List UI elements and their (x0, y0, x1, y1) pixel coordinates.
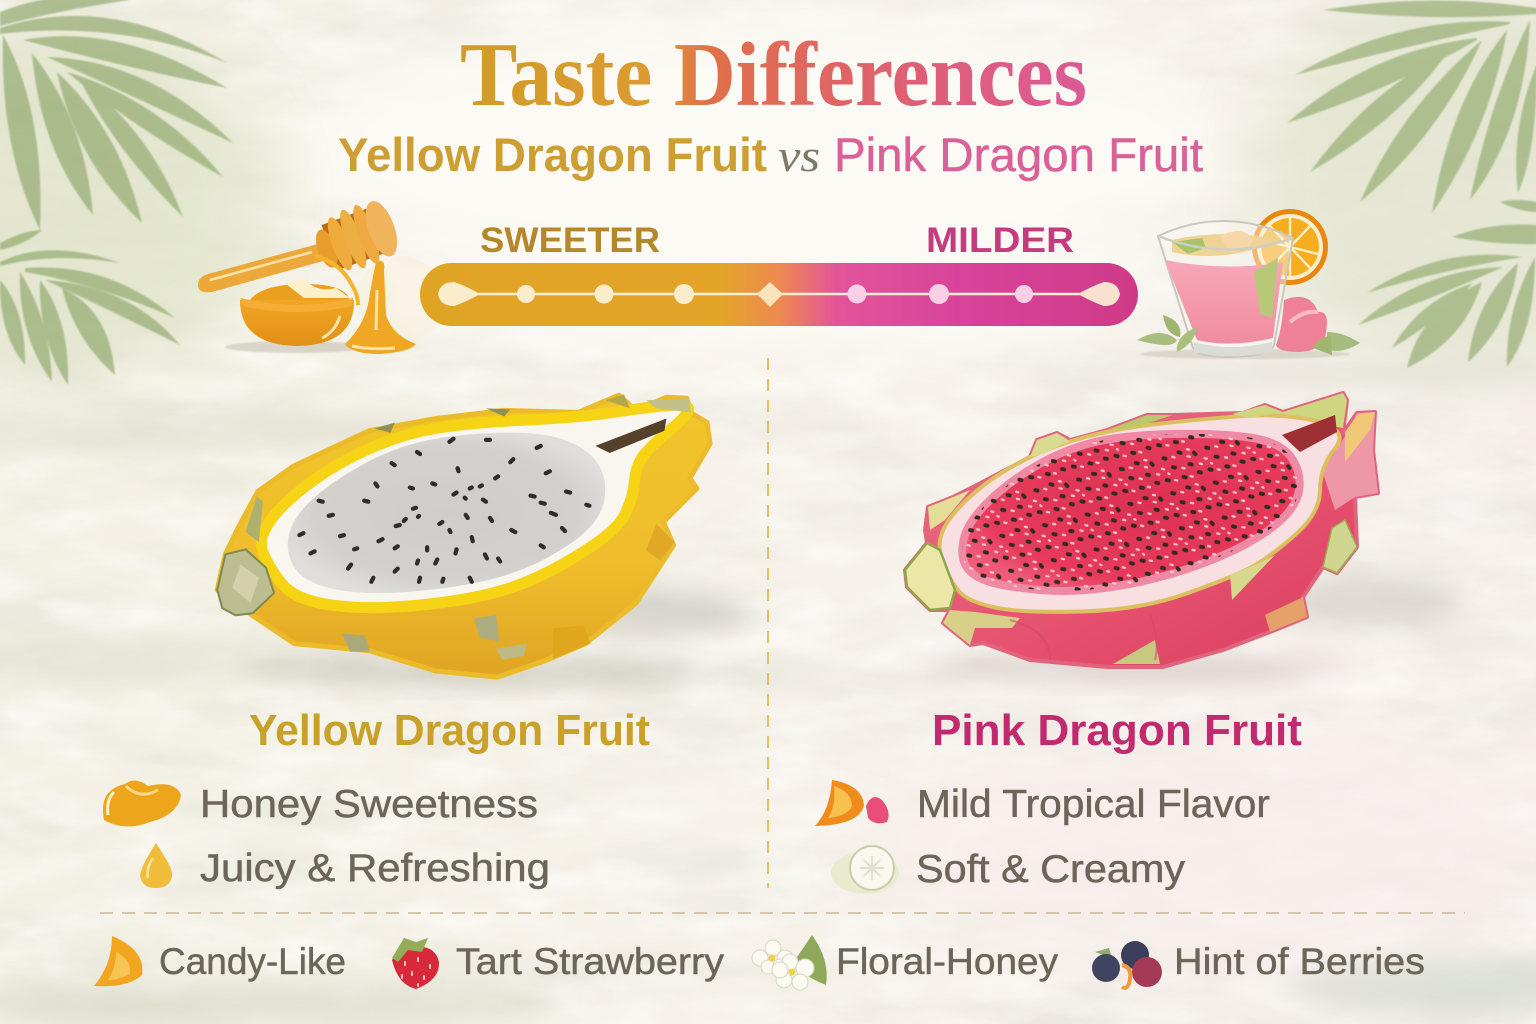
icon: pink smoothie with orange (1137, 209, 1360, 359)
pith (939, 415, 1340, 612)
item: floral-honey (752, 935, 1059, 990)
heading: pink dragon fruit: Pink Dragon Fruit (932, 706, 1302, 755)
list item: soft and creamy: Soft & Creamy (916, 848, 1186, 891)
panel: yellow dragon fruit illustration (217, 394, 748, 686)
right and top rind tips (1322, 412, 1378, 510)
panel: pink dragon fruit illustration (905, 393, 1460, 682)
item: tart strawberry (392, 938, 725, 989)
icon: honey dipper and bowl (198, 195, 444, 354)
flesh (962, 434, 1300, 591)
rind body (905, 393, 1378, 667)
list item: mild tropical flavor (815, 780, 1270, 826)
list item: mild tropical flavor: Mild Tropical Flavor (917, 783, 1270, 826)
heading: yellow dragon fruit: Yellow Dragon Fruit (249, 706, 650, 755)
pith and bright rim (261, 405, 688, 608)
subtitle: Yellow Dragon Fruit (338, 128, 767, 181)
title: Taste Differences (460, 24, 1087, 125)
palm frond: top right (1287, 0, 1536, 368)
list item: honey sweetness: Honey Sweetness (200, 783, 538, 826)
subtitle (338, 128, 1203, 181)
horizontal dashed divider (100, 912, 1465, 914)
flesh (288, 433, 605, 593)
item: hint of berries: Hint of Berries (1174, 941, 1425, 982)
item: candy-like: Candy-Like (159, 941, 346, 982)
list item: honey sweetness (103, 780, 538, 827)
center dashed divider (767, 358, 769, 888)
label: sweeter: SWEETER (480, 221, 660, 260)
subtitle: vs (778, 130, 820, 181)
item: floral-honey: Floral-Honey (836, 941, 1059, 982)
flavor scale slider (420, 263, 1138, 326)
item: tart strawberry: Tart Strawberry (456, 941, 725, 982)
label: milder: MILDER (926, 221, 1074, 260)
item: hint of berries (1092, 941, 1425, 988)
subtitle: Pink Dragon Fruit (834, 128, 1203, 181)
item: candy-like (94, 936, 346, 986)
list item: juicy and refreshing: Juicy & Refreshing (200, 847, 550, 890)
list item: soft and creamy (831, 846, 1186, 894)
palm frond: top left (0, 0, 233, 385)
rind body (217, 395, 710, 677)
